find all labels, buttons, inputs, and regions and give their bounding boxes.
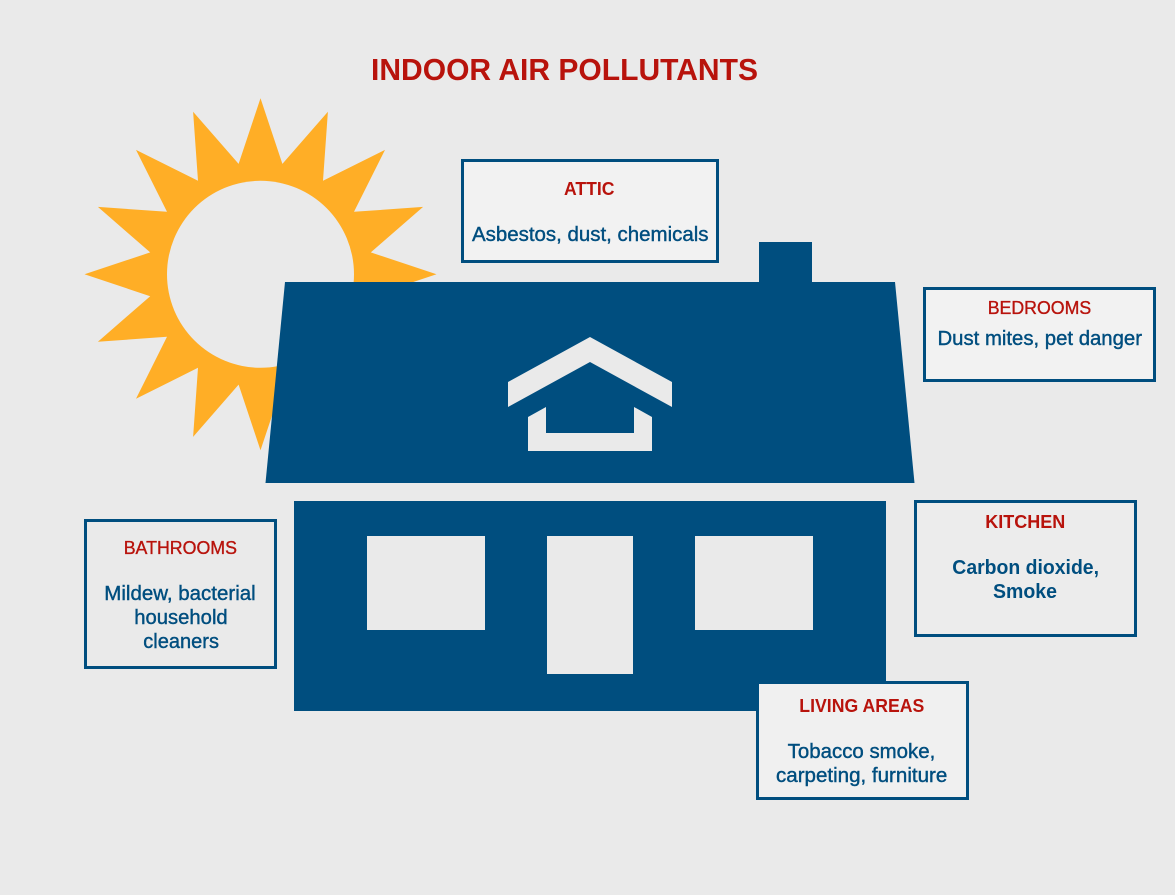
bedrooms heading: BEDROOMS (988, 298, 1091, 318)
left window (367, 536, 485, 630)
living areas heading: LIVING AREAS (799, 696, 924, 716)
bathrooms pollutants (104, 583, 256, 653)
icon: sun (84, 98, 436, 450)
door (547, 536, 633, 674)
panel: bedrooms (924, 288, 1154, 380)
attic heading: ATTIC (564, 179, 614, 199)
bathrooms heading: BATHROOMS (124, 538, 237, 558)
living areas pollutants (776, 741, 947, 787)
house body (294, 501, 886, 711)
bathrooms pollutants: Mildew, bacterial (104, 583, 256, 605)
bathrooms pollutants: cleaners (143, 631, 219, 653)
kitchen pollutants: Carbon dioxide, (952, 557, 1099, 579)
right window (695, 536, 813, 630)
kitchen pollutants (952, 557, 1099, 603)
living areas pollutants: Tobacco smoke, (788, 741, 935, 763)
bedrooms pollutants: Dust mites, pet danger (938, 328, 1142, 350)
roof (266, 282, 914, 483)
title: INDOOR AIR POLLUTANTS (371, 52, 758, 87)
kitchen pollutants: Smoke (993, 581, 1057, 603)
panel: bathrooms (86, 520, 276, 668)
panel: kitchen (916, 502, 1136, 636)
chimney (759, 242, 812, 283)
panel: attic (462, 160, 718, 262)
attic pollutants: Asbestos, dust, chemicals (472, 224, 708, 246)
bathrooms pollutants: household (134, 607, 228, 629)
panel: living areas (758, 682, 968, 798)
icon: home symbol on roof (508, 337, 672, 451)
house illustration (266, 242, 914, 711)
living areas pollutants: carpeting, furniture (776, 765, 947, 787)
kitchen heading: KITCHEN (985, 512, 1065, 532)
